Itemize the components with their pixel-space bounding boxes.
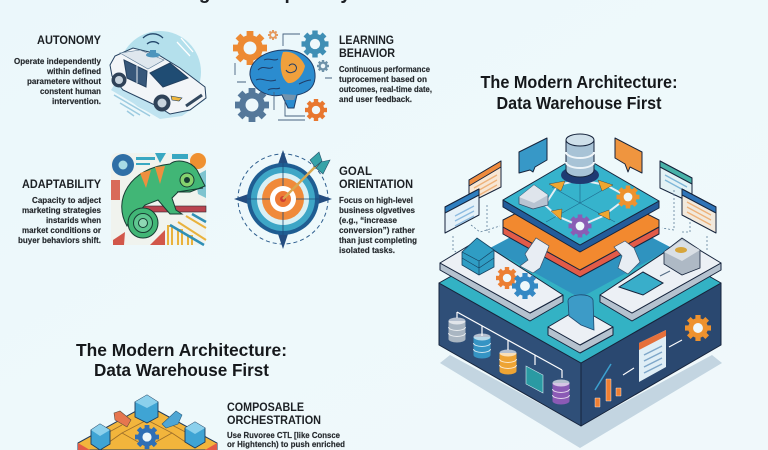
right white platform xyxy=(600,240,721,321)
icon: chameleon xyxy=(111,153,206,245)
heading: right architecture title: The Modern Architecture: xyxy=(480,72,678,92)
icon: document on front platform xyxy=(568,295,594,330)
panel: autonomy text: intervention. xyxy=(52,96,101,106)
heading: right architecture title xyxy=(480,72,678,113)
panel: composable orchestration text: ORCHESTRATION xyxy=(227,415,321,427)
right face chart and report xyxy=(595,315,711,407)
left white platform xyxy=(440,240,563,321)
panel: learning behavior text: and user feedback. xyxy=(339,94,412,104)
panel: adaptability text: buyer behaviors shift. xyxy=(18,235,101,245)
panel: autonomy text: parametere without xyxy=(27,76,101,86)
panel: composable orchestration text: COMPOSABLE xyxy=(227,402,304,414)
dashed connectors xyxy=(453,190,707,252)
panel: learning behavior text xyxy=(339,35,432,104)
panel: goal orientation text: isolated tasks. xyxy=(339,245,395,255)
icon: target with arrow xyxy=(234,150,332,249)
left platform cube and gears xyxy=(462,238,538,299)
panel: adaptability text: marketing strategies xyxy=(22,205,101,215)
heading: right architecture title: Data Warehouse First xyxy=(496,93,662,113)
panel: goal orientation text: (e.g., “increase xyxy=(339,215,397,225)
recessed centre xyxy=(490,200,672,298)
panel: autonomy text xyxy=(14,35,101,106)
panel: autonomy text: constent human xyxy=(40,86,101,96)
panel: adaptability text: ADAPTABILITY xyxy=(22,179,101,191)
panel: adaptability text xyxy=(18,179,102,245)
heading: lower architecture title: Data Warehouse First xyxy=(94,360,269,380)
panel: adaptability text: instarids when xyxy=(46,215,101,225)
panel: autonomy text: within defined xyxy=(46,66,101,76)
front white platform xyxy=(548,308,613,353)
panel: goal orientation text: conversion”) rather xyxy=(339,225,416,235)
panel: composable orchestration text: Use Ruvoree CTL [like Consce xyxy=(227,430,340,440)
icon: brain with gears xyxy=(233,30,332,122)
teal top plate xyxy=(503,155,659,252)
heading: lower architecture title: The Modern Architecture: xyxy=(76,340,287,360)
icon: composable orchestration grid xyxy=(78,395,217,450)
panel: goal orientation text: business olgvetives xyxy=(339,205,415,215)
panel: adaptability text: Capacity to adject xyxy=(32,195,101,205)
panel: goal orientation text: ORIENTATION xyxy=(339,179,413,191)
ground shadow xyxy=(440,355,722,448)
icon: autonomous car xyxy=(110,31,206,119)
base block xyxy=(439,203,721,426)
panel: autonomy text: AUTONOMY xyxy=(37,35,101,47)
panel: learning behavior text: Continuous performance xyxy=(339,64,430,74)
panel: adaptability text: market conditions or xyxy=(22,225,102,235)
panel: goal orientation text xyxy=(339,166,417,255)
panel: learning behavior text: outcomes, real-time date, xyxy=(339,84,432,94)
panel: composable orchestration text: or Hightench) to push enriched xyxy=(227,439,345,449)
right platform server and tablet xyxy=(619,238,700,295)
panel: autonomy text: Operate independently xyxy=(14,56,101,66)
left face databases xyxy=(448,312,570,404)
floating cards right xyxy=(615,138,716,233)
chart: isometric data warehouse stack xyxy=(439,134,722,448)
top plate flow diagram xyxy=(519,180,640,238)
panel: learning behavior text: LEARNING xyxy=(339,35,394,47)
heading: lower architecture title xyxy=(76,340,287,380)
panel: learning behavior text: tuprocement based on xyxy=(339,74,427,84)
panel: goal orientation text: GOAL xyxy=(339,166,372,178)
panel: composable orchestration text xyxy=(227,402,345,449)
white connectors xyxy=(520,238,640,274)
panel: goal orientation text: than just completing xyxy=(339,235,417,245)
floating cards left xyxy=(445,138,547,233)
database cylinder xyxy=(561,134,599,184)
orange layer xyxy=(503,180,659,277)
panel: goal orientation text: Focus on high-level xyxy=(339,195,413,205)
panel: learning behavior text: BEHAVIOR xyxy=(339,48,396,60)
